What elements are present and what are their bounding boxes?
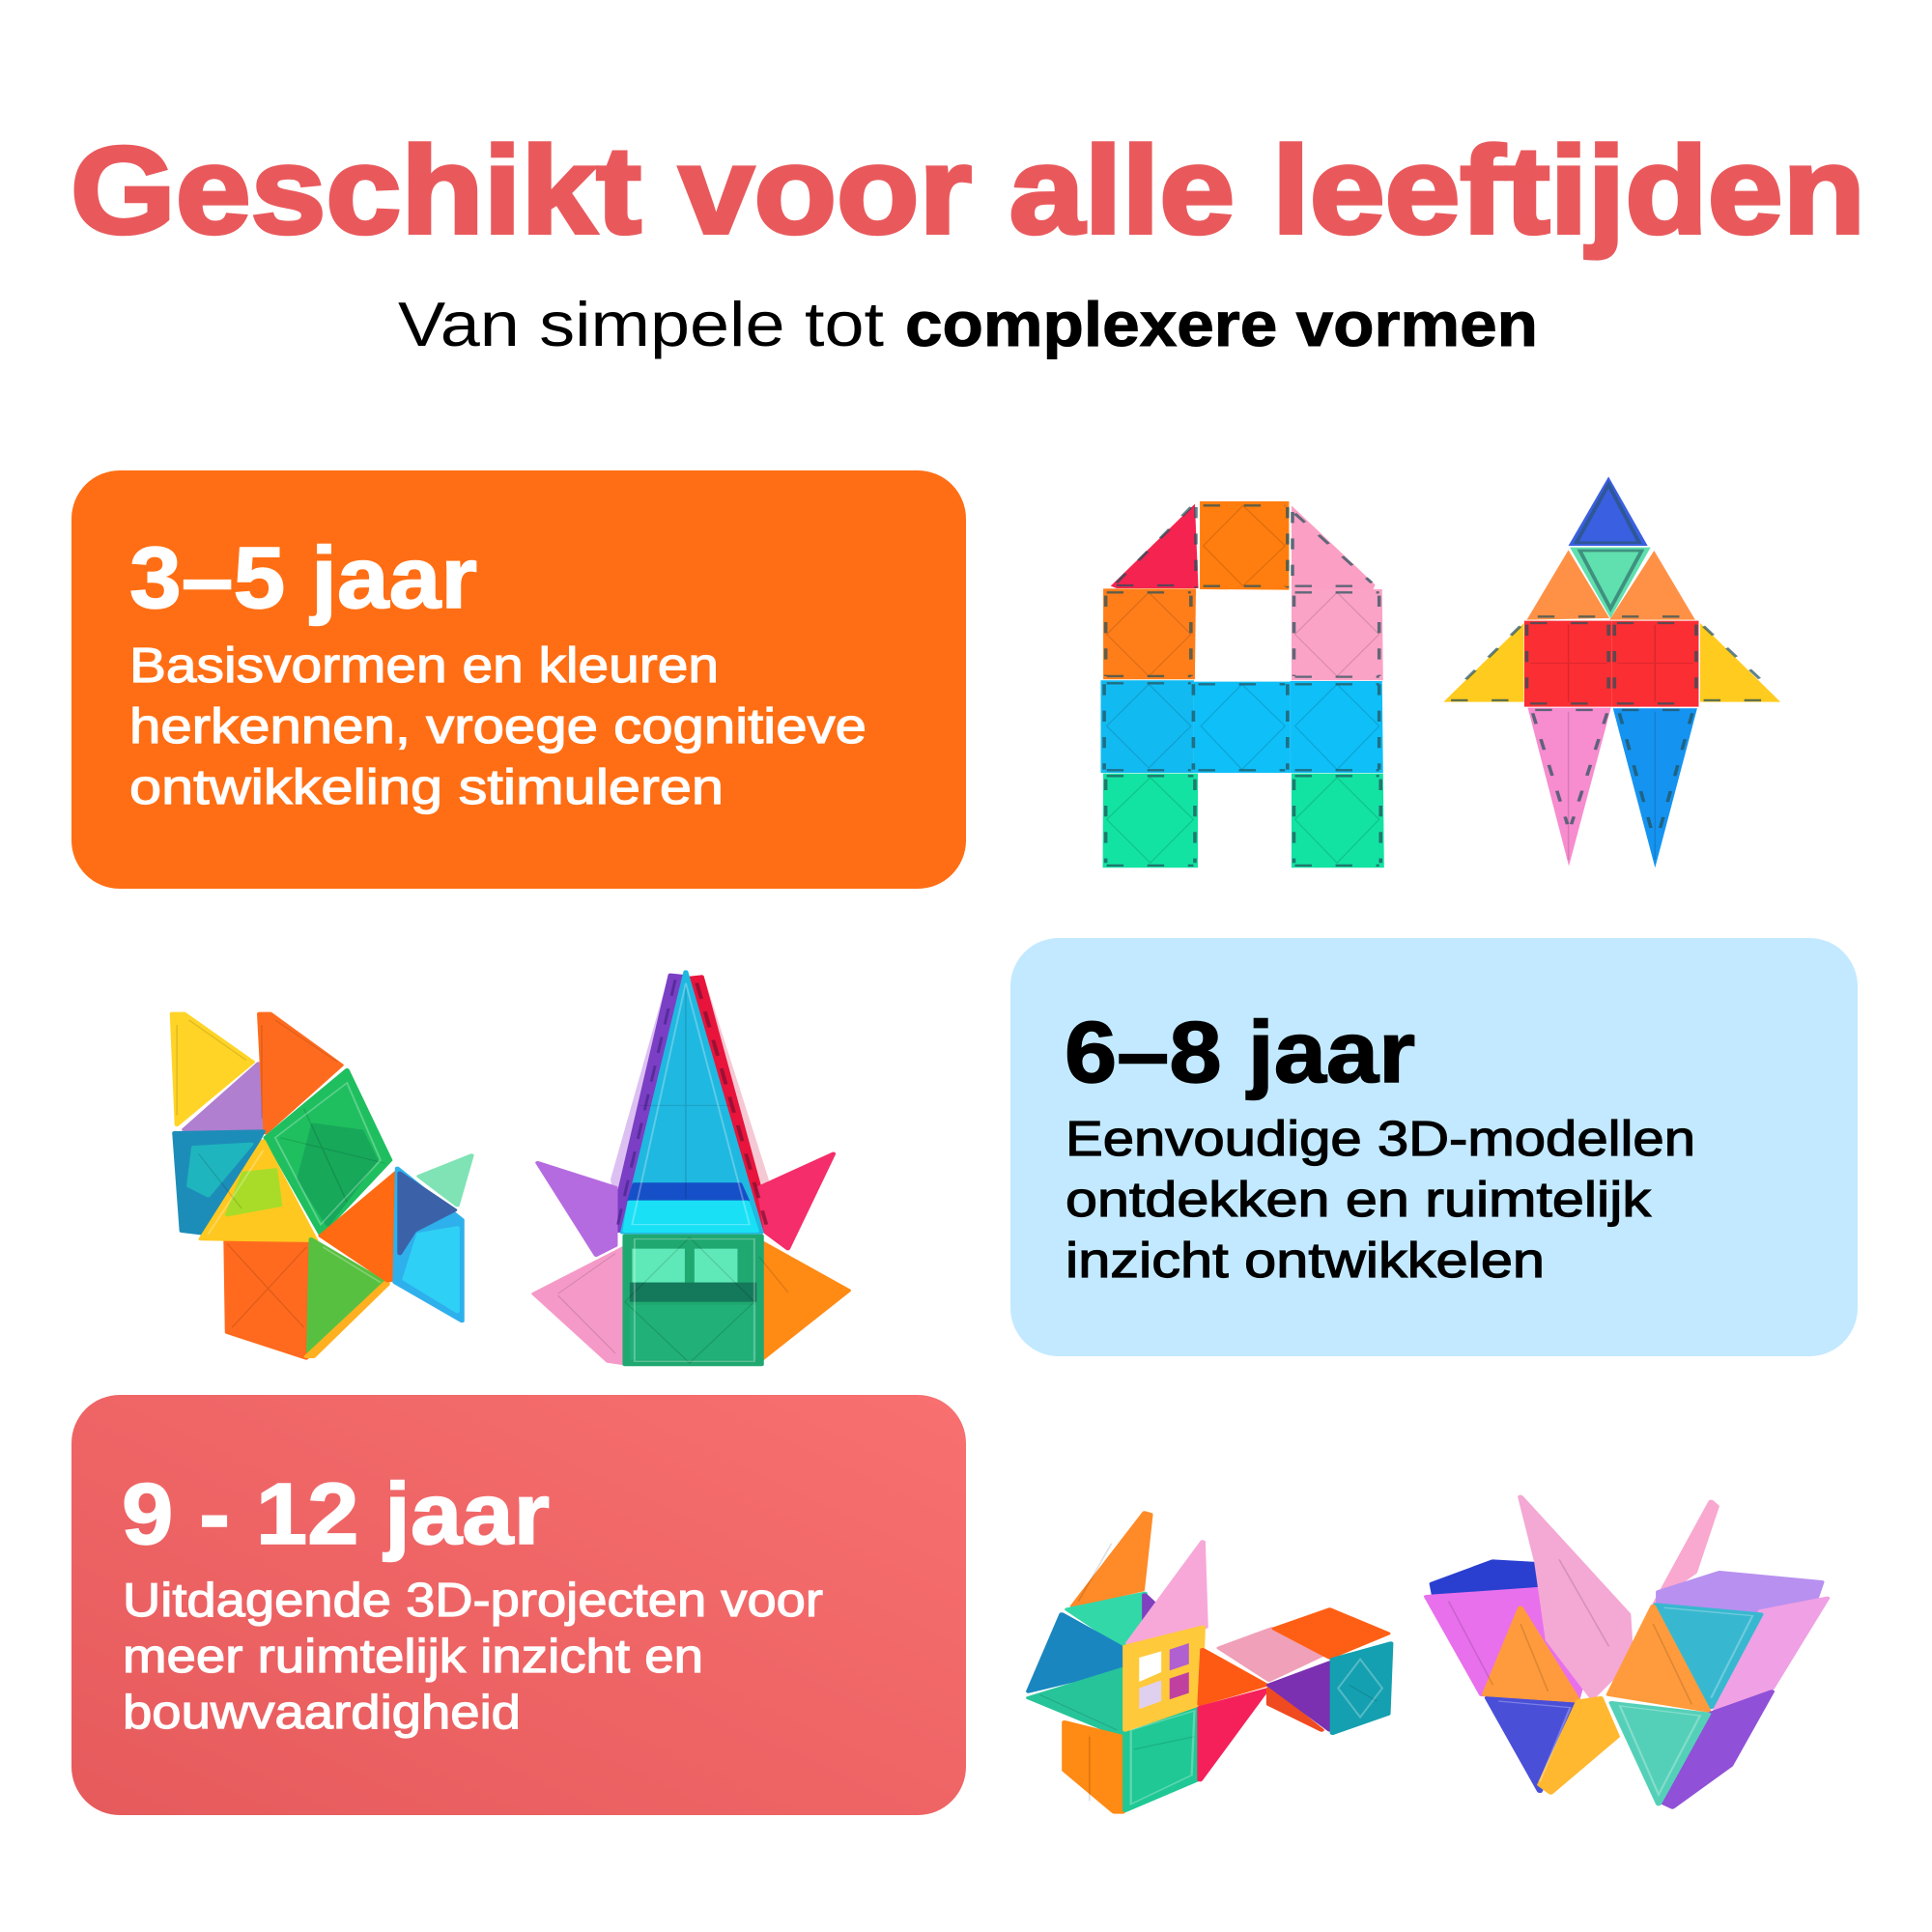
text: 6–8 jaar description — [1065, 1111, 1695, 1288]
text: 3–5 jaar description: herkennen, vroege cognitieve — [129, 698, 867, 753]
heading: 6–8 jaar: 6–8 jaar — [1065, 1005, 1415, 1101]
text: 9 - 12 jaar description: bouwvaardigheid — [123, 1687, 521, 1739]
text: 3–5 jaar description: ontwikkeling stimuleren — [129, 759, 724, 814]
icon: rocket tiles — [1443, 476, 1780, 867]
icon: 3D house — [1029, 1513, 1391, 1812]
text: 6–8 jaar description: ontdekken en ruimtelijk — [1065, 1172, 1652, 1227]
text: 6–8 jaar description: inzicht ontwikkelen — [1065, 1233, 1545, 1288]
subtitle — [398, 289, 1538, 359]
title: Geschikt voor alle leeftijden — [71, 122, 1865, 260]
illustration: letter A and rocket tiles — [1101, 476, 1780, 867]
illustration: 3D creature and tower — [172, 972, 849, 1365]
text: 9 - 12 jaar description: meer ruimtelijk inzicht en — [123, 1631, 703, 1683]
text: 3–5 jaar description — [129, 638, 867, 814]
panel: 6–8 jaar — [1010, 938, 1858, 1356]
icon: tower — [534, 972, 849, 1365]
text: 6–8 jaar description: Eenvoudige 3D-modellen — [1065, 1111, 1695, 1166]
text: 9 - 12 jaar description — [123, 1575, 823, 1739]
heading: 3–5 jaar: 3–5 jaar — [129, 530, 477, 627]
panel: 3–5 jaar — [71, 470, 966, 889]
panel: 9 - 12 jaar — [71, 1395, 966, 1815]
heading: 9 - 12 jaar: 9 - 12 jaar — [122, 1466, 550, 1563]
text: 3–5 jaar description: Basisvormen en kleuren — [129, 638, 719, 693]
text: 9 - 12 jaar description: Uitdagende 3D-projecten voor — [123, 1575, 823, 1627]
icon: 3D creature — [172, 1013, 471, 1358]
icon: 3D butterfly model — [1427, 1496, 1827, 1807]
icon: letter A tiles — [1101, 501, 1384, 867]
subtitle: complexere vormen — [905, 289, 1538, 359]
subtitle: Van simpele tot — [398, 289, 884, 359]
illustration: 3D house and butterfly — [1029, 1496, 1827, 1812]
